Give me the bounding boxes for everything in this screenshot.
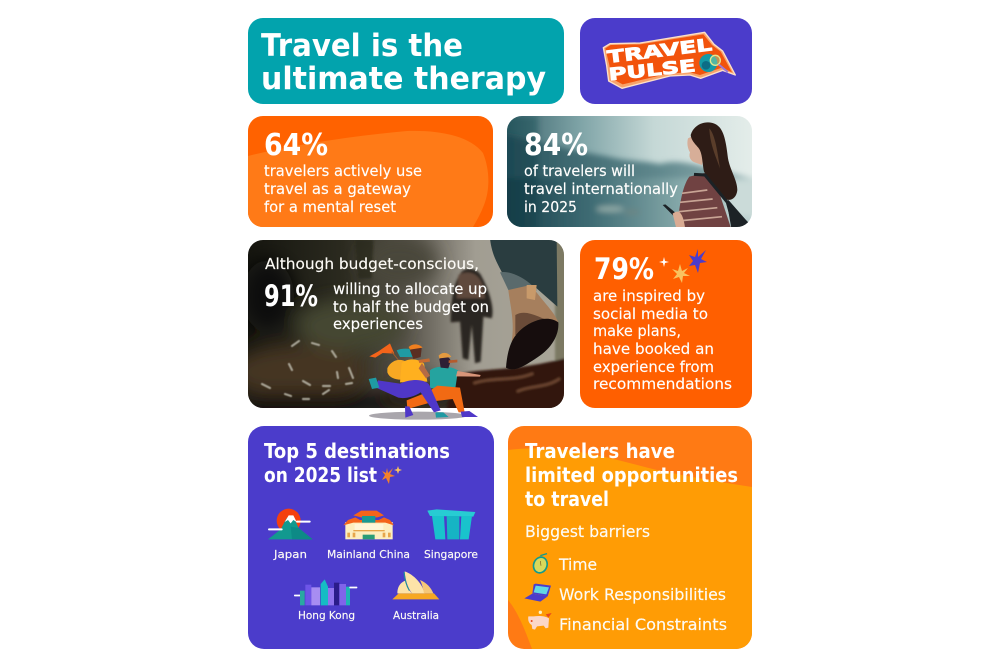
heading: Top 5 destinations: [264, 439, 450, 463]
stat number: 79%: [594, 252, 654, 286]
panel: Travel Pulse logo: [580, 18, 752, 104]
stat description: are inspired by: [593, 287, 705, 305]
panel: 84% statistic with traveler photo: [507, 116, 752, 227]
stat description: travelers actively use: [264, 162, 422, 180]
stat number: 91%: [264, 279, 318, 313]
panel: title: [248, 18, 564, 104]
stat description: in 2025: [524, 198, 577, 216]
stat description: for a mental reset: [264, 198, 396, 216]
heading: Travelers have: [525, 439, 675, 463]
stat description: travel as a gateway: [264, 180, 411, 198]
stat description: [593, 287, 732, 393]
label: Australia: [393, 610, 439, 622]
stat description: to half the budget on: [333, 298, 489, 316]
heading: limited opportunities: [525, 463, 738, 487]
heading: to travel: [525, 487, 609, 511]
icon: Australia: [392, 571, 439, 599]
heading: ultimate therapy: [261, 61, 546, 97]
barrier label: time: Time: [558, 555, 597, 574]
stat description: make plans,: [593, 322, 681, 340]
decorative amber shape: [508, 448, 752, 649]
logo: Travel Pulse badge: TRAVEL: [606, 35, 713, 68]
panel: 64% statistic: [248, 116, 493, 227]
icon: piggy bank: [528, 611, 552, 630]
trail dashes: [262, 341, 353, 399]
heading: [525, 439, 738, 511]
stat description: [333, 280, 489, 333]
stat description: experiences: [333, 315, 423, 333]
icon: Mainland China: [343, 511, 394, 539]
barrier label: financial: Financial Constraints: [559, 615, 727, 634]
subheading: Biggest barriers: [525, 522, 650, 541]
logo: Travel Pulse badge: PULSE: [608, 56, 697, 85]
heading: [261, 28, 546, 97]
stat number: 84%: [524, 128, 588, 163]
logo: Travel Pulse badge: [603, 32, 735, 88]
stat description: willing to allocate up: [333, 280, 487, 298]
heading: [264, 439, 450, 487]
stat description: of travelers will: [524, 162, 635, 180]
icon: stopwatch: [531, 554, 549, 575]
text: budget-conscious: Although budget-conscious,: [265, 255, 479, 273]
icon: laptop: [524, 584, 551, 602]
panel: 91% statistic with hiking photo: [230, 236, 570, 420]
icon: Singapore: [427, 509, 475, 539]
icon: Hong Kong: [294, 579, 357, 605]
stat description: have booked an: [593, 340, 714, 358]
stat description: recommendations: [593, 375, 732, 393]
panel: 79% statistic: [580, 240, 752, 408]
stat number: 64%: [264, 128, 328, 163]
label: Hong Kong: [298, 610, 355, 622]
icon: sparkles: [659, 249, 707, 283]
illustration: two hikers: [369, 343, 481, 420]
decorative lighter blob: [248, 131, 488, 227]
barrier label: work: Work Responsibilities: [559, 585, 726, 604]
photo: coastline and woman: [507, 116, 752, 227]
label: Singapore: [424, 549, 478, 561]
stat description: experience from: [593, 358, 714, 376]
label: Japan: [273, 549, 307, 561]
heading: on 2025 list: [264, 463, 377, 487]
stat description: travel internationally: [524, 180, 678, 198]
stat description: [264, 162, 422, 216]
label: Mainland China: [327, 549, 410, 561]
photo: hiking boots on forest trail: [248, 240, 564, 408]
stat description: social media to: [593, 305, 708, 323]
icon: sparkles: [382, 466, 402, 484]
icon: Japan: [268, 509, 313, 539]
panel: limited opportunities: [508, 426, 752, 649]
stat description: [524, 162, 678, 216]
heading: Travel is the: [261, 28, 463, 64]
panel: top 5 destinations: [248, 426, 494, 649]
